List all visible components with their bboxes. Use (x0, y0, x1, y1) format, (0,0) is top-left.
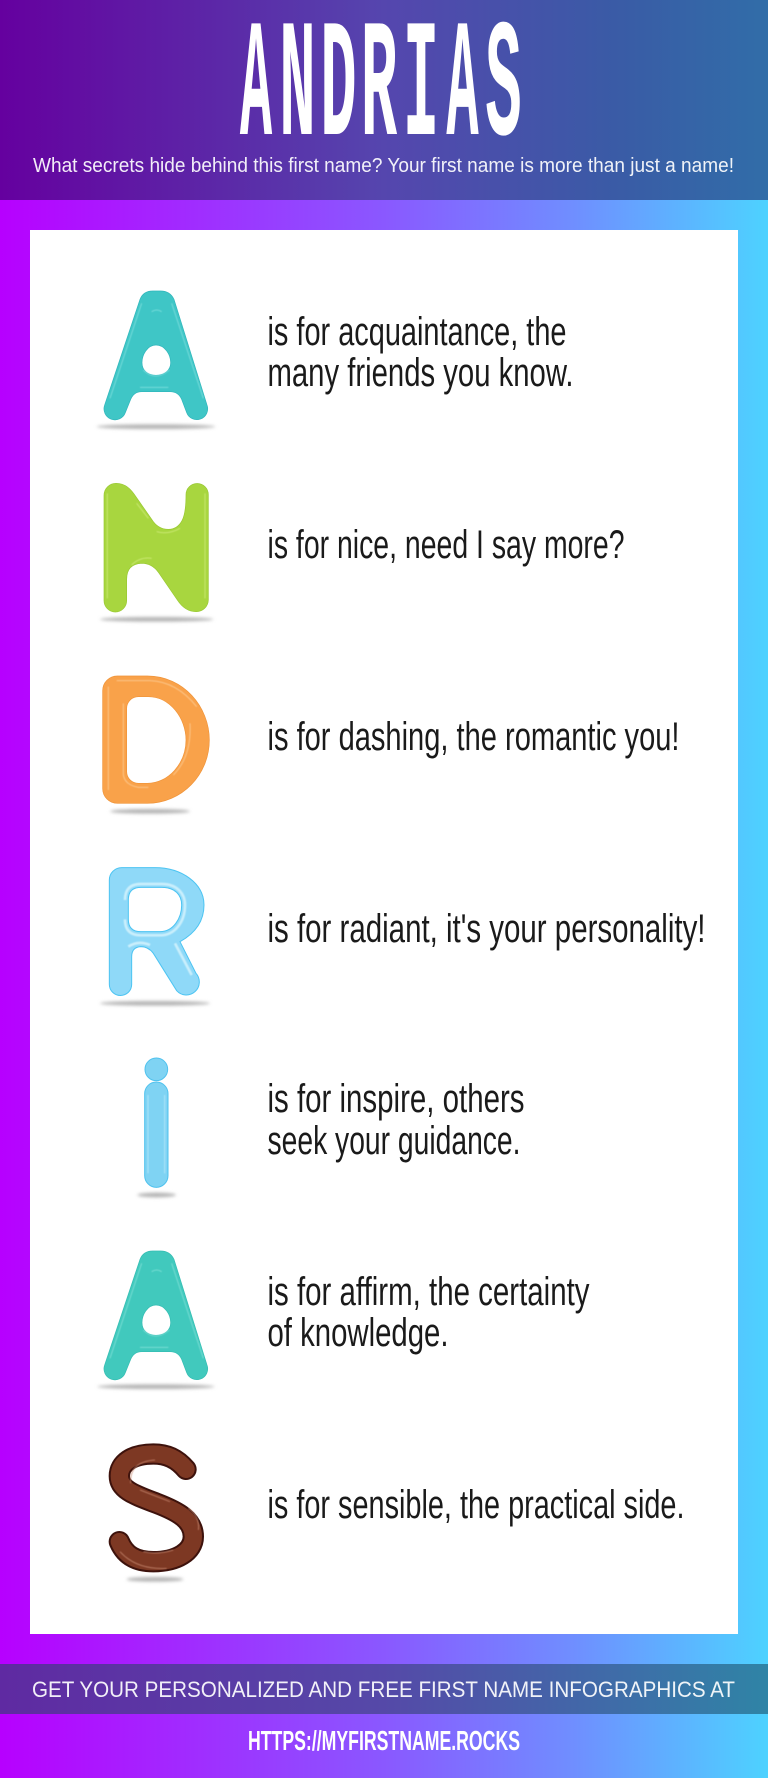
row: R radiant (100, 868, 705, 1006)
text line block (268, 1077, 524, 1163)
title (240, 0, 522, 185)
subtitle: What secrets hide behind this first name? Your first name is more than just a name! (33, 155, 734, 177)
icon: green letter N (100, 483, 213, 622)
row: A affirm (97, 1251, 590, 1389)
text line block: of knowledge. (268, 1311, 448, 1355)
text line block: many friends you know. (268, 351, 574, 395)
text line block: is for acquaintance, the (268, 310, 566, 354)
row: D dashing (103, 676, 679, 814)
row: S sensible (119, 1454, 684, 1582)
row: A acquaintance (97, 291, 574, 429)
icon: blue letter i (137, 1058, 176, 1197)
footer URL: HTTPS://MYFIRSTNAME.ROCKS (248, 1725, 520, 1756)
footer band (0, 1664, 768, 1714)
title: A (446, 0, 479, 185)
row: I inspire (137, 1058, 524, 1197)
text line block (268, 310, 574, 395)
icon: teal letter A (97, 1251, 215, 1389)
row: N nice (100, 483, 624, 622)
icon: orange letter D (103, 676, 209, 814)
text line block: seek your guidance. (268, 1119, 520, 1163)
title: A (240, 0, 272, 185)
white content panel (30, 230, 738, 1634)
header band (0, 0, 768, 200)
text line block: is for affirm, the certainty (268, 1270, 590, 1314)
text line block: is for inspire, others (268, 1077, 524, 1121)
icon: brown letter S (119, 1454, 199, 1582)
footer call to action: GET YOUR PERSONALIZED AND FREE FIRST NAME INFOGRAPHICS AT (32, 1677, 735, 1702)
icon: light blue letter R (100, 868, 210, 1006)
icon: teal letter A (97, 291, 215, 429)
text line: is for nice, need I say more? (268, 523, 624, 567)
text line block (268, 1270, 590, 1355)
